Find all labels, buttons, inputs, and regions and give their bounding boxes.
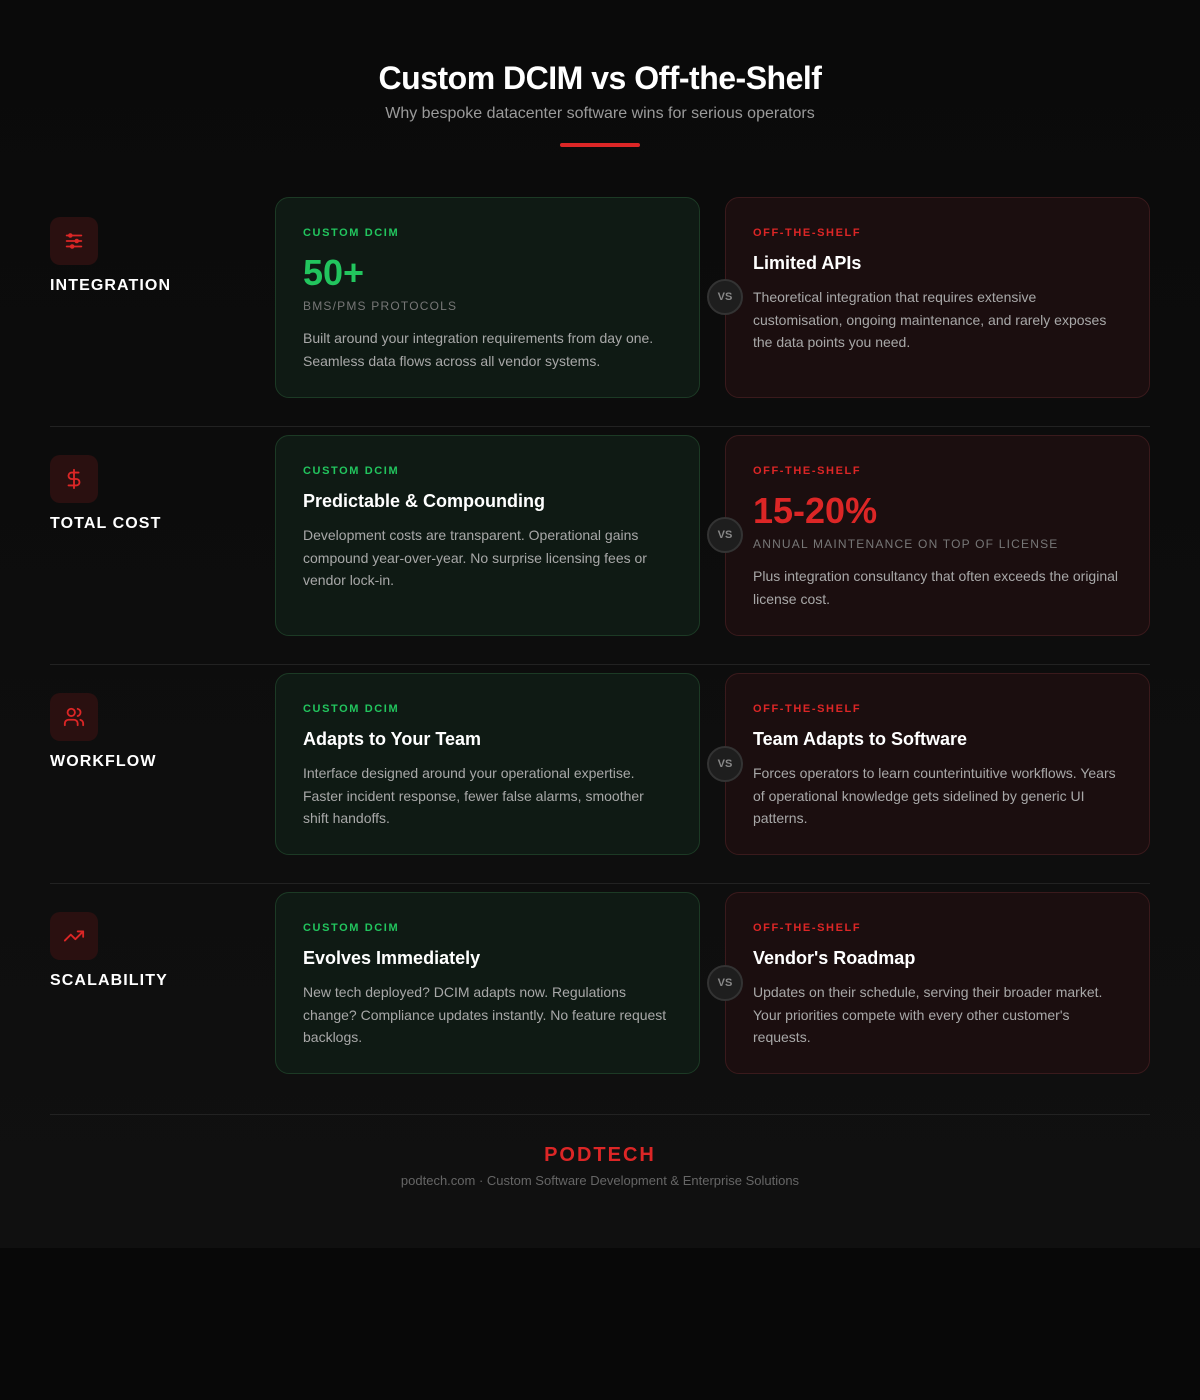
vs badge [707, 279, 743, 315]
vs badge [707, 965, 743, 1001]
card: off-the-shelf integration: Theoretical integration that requires extensive customisation, ongoing maintenance, and rarely exposes the data points you need. [753, 289, 1106, 350]
card: off-the-shelf scalability: Updates on their schedule, serving their broader market. Your priorities compete with every other customer's requests. [753, 984, 1102, 1045]
card: off-the-shelf cost: Plus integration consultancy that often exceeds the original license cost. [753, 568, 1118, 606]
card: off-the-shelf scalability: OFF-THE-SHELF [753, 922, 861, 934]
row: total cost [50, 455, 161, 532]
label: TOTAL COST [50, 515, 161, 532]
title: Custom DCIM vs Off-the-Shelf [379, 60, 821, 96]
icon: sliders [50, 217, 98, 265]
card: custom workflow: Adapts to Your Team [303, 729, 481, 749]
card: off-the-shelf integration [725, 197, 1150, 398]
card: off-the-shelf scalability: Vendor's Roadmap [753, 948, 915, 968]
card: custom cost: Development costs are transparent. Operational gains compound year-over-year. No surprise licensing fees or vendor lock-in. [303, 527, 647, 588]
row: scalability [50, 912, 168, 989]
card: custom cost: CUSTOM DCIM [303, 465, 399, 477]
vs badge: VS [718, 291, 732, 303]
card: custom scalability: Evolves Immediately [303, 948, 480, 968]
vs badge [707, 746, 743, 782]
footer [401, 1144, 799, 1188]
card: custom integration: CUSTOM DCIM [303, 227, 399, 239]
card: custom scalability [275, 892, 700, 1074]
card: custom scalability: CUSTOM DCIM [303, 922, 399, 934]
card: custom integration [275, 197, 700, 398]
icon: users [50, 693, 98, 741]
card: off-the-shelf integration: OFF-THE-SHELF [753, 227, 861, 239]
card: off-the-shelf cost [725, 435, 1150, 636]
vs badge [707, 517, 743, 553]
card: off-the-shelf workflow: Team Adapts to Software [753, 729, 967, 749]
label: INTEGRATION [50, 277, 171, 294]
card: custom integration: Built around your integration requirements from day one. Seamless data flows across all vendor systems. [303, 330, 653, 368]
card: custom integration: BMS/PMS PROTOCOLS [303, 299, 457, 313]
vs badge: VS [718, 977, 732, 989]
card: custom workflow [275, 673, 700, 855]
card: custom workflow: Interface designed around your operational expertise. Faster incident response, fewer false alarms, smoother shift handoffs. [303, 765, 644, 826]
subtitle: Why bespoke datacenter software wins for serious operators [385, 105, 815, 122]
card: custom cost [275, 435, 700, 636]
card: off-the-shelf workflow: Forces operators to learn counterintuitive workflows. Years of operational knowledge gets sidelined by generic UI patterns. [753, 765, 1116, 826]
label: WORKFLOW [50, 753, 157, 770]
icon: dollar [50, 455, 98, 503]
label: SCALABILITY [50, 972, 168, 989]
footer: PODTECH [544, 1144, 656, 1166]
card: custom workflow: CUSTOM DCIM [303, 703, 399, 715]
card: off-the-shelf workflow [725, 673, 1150, 855]
footer: podtech.com · Custom Software Development & Enterprise Solutions [401, 1173, 799, 1188]
card: off-the-shelf cost: ANNUAL MAINTENANCE ON TOP OF LICENSE [753, 537, 1058, 551]
vs badge: VS [718, 758, 732, 770]
vs badge: VS [718, 529, 732, 541]
row: integration [50, 217, 171, 294]
card: custom integration: 50+ [303, 252, 364, 293]
row: workflow [50, 693, 157, 770]
card: off-the-shelf cost: 15-20% [753, 490, 877, 531]
icon: trending up [50, 912, 98, 960]
card: custom scalability: New tech deployed? DCIM adapts now. Regulations change? Compliance updates instantly. No feature request backlogs. [303, 984, 666, 1045]
card: off-the-shelf workflow: OFF-THE-SHELF [753, 703, 861, 715]
card: off-the-shelf cost: OFF-THE-SHELF [753, 465, 861, 477]
card: custom cost: Predictable & Compounding [303, 491, 545, 511]
card: off-the-shelf scalability [725, 892, 1150, 1074]
card: off-the-shelf integration: Limited APIs [753, 253, 861, 273]
